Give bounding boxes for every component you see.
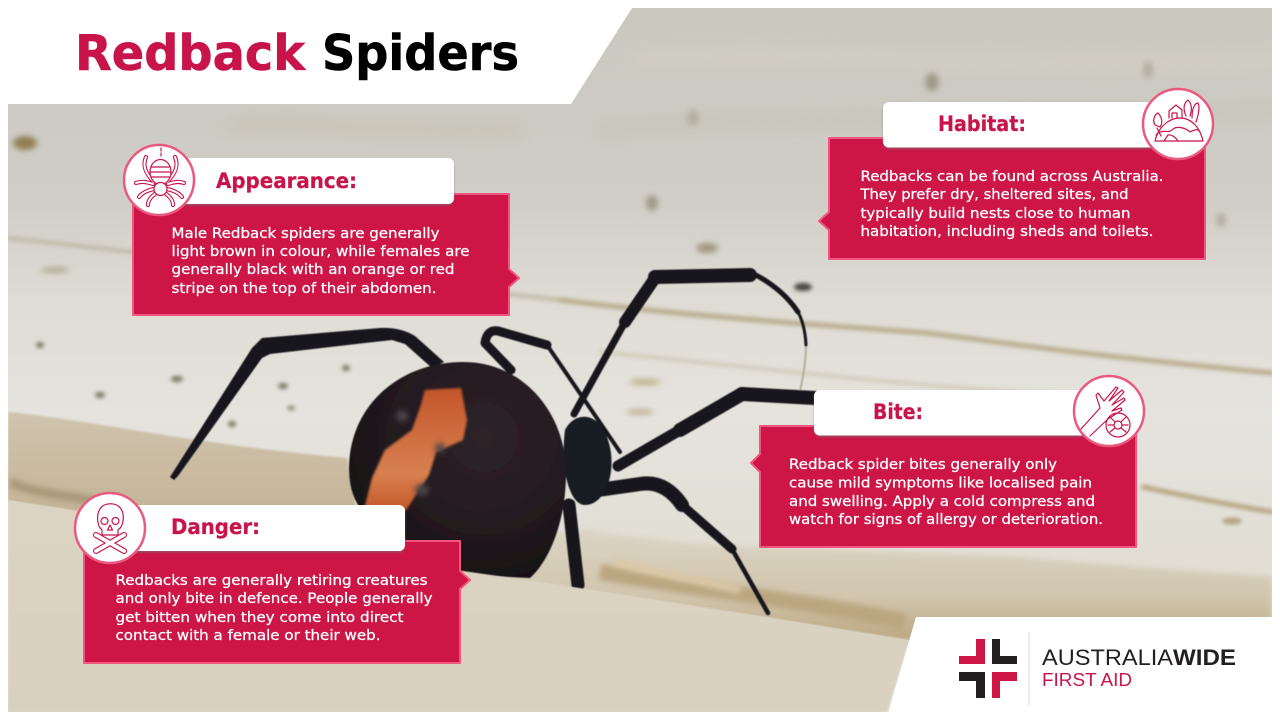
- panel: habitat: [819, 89, 1213, 259]
- icon: habitat: [1143, 89, 1213, 159]
- body text: stripe on the top of their abdomen.: [172, 281, 436, 297]
- body text: generally black with an orange or red: [172, 262, 454, 278]
- title text: Spiders: [322, 25, 519, 82]
- body text: light brown in colour, while females are: [172, 244, 470, 260]
- heading label: [170, 158, 454, 204]
- heading label: [125, 505, 405, 551]
- icon: bite on hand: [1074, 376, 1144, 446]
- title banner: [0, 0, 632, 104]
- body text: [116, 573, 432, 644]
- panel: danger: [75, 493, 470, 663]
- logo wordmark: AUSTRALIA: [1042, 645, 1173, 670]
- body text: contact with a female or their web.: [116, 628, 380, 644]
- logo wordmark: FIRST AID: [1042, 670, 1132, 690]
- title text: Redback: [75, 25, 306, 82]
- heading: Bite:: [873, 400, 923, 424]
- spider photo: [170, 273, 815, 613]
- body text: and swelling. Apply a cold compress and: [789, 494, 1095, 510]
- body text: [172, 226, 470, 297]
- body text: Male Redback spiders are generally: [172, 226, 440, 242]
- red text box: [84, 541, 470, 663]
- heading label: [883, 102, 1173, 148]
- icon: skull and crossbones: [75, 493, 145, 563]
- body text: habitation, including sheds and toilets.: [860, 224, 1154, 240]
- red text box: [751, 426, 1136, 547]
- panel: bite: [751, 376, 1144, 547]
- abdomen: [349, 362, 566, 578]
- red text box: [819, 138, 1205, 259]
- logo: cross mark: [959, 639, 1017, 698]
- body text: [859, 169, 1164, 240]
- red stripe: [364, 388, 467, 510]
- heading: Danger:: [171, 515, 260, 539]
- faint leg shadow: [800, 345, 806, 392]
- red text box: [133, 194, 519, 315]
- heading: Appearance:: [216, 169, 357, 193]
- body text: typically build nests close to human: [860, 206, 1130, 222]
- body text: get bitten when they come into direct: [116, 610, 404, 626]
- front board over spider: [8, 500, 909, 712]
- logo wordmark: [1042, 645, 1236, 690]
- left leg: [170, 328, 444, 480]
- body text: Redback spider bites generally only: [789, 457, 1057, 473]
- body text: and only bite in defence. People generally: [116, 591, 432, 607]
- body text: Redbacks are generally retiring creatures: [116, 573, 428, 589]
- body text: watch for signs of allergy or deterioration.: [789, 512, 1103, 528]
- logo panel: [886, 617, 1280, 720]
- body text: They prefer dry, sheltered sites, and: [859, 187, 1128, 203]
- cephalothorax: [564, 417, 612, 505]
- body text: [789, 457, 1103, 528]
- panel: appearance: [124, 145, 519, 315]
- logo wordmark: WIDE: [1173, 645, 1236, 670]
- abdomen highlights: [396, 410, 445, 496]
- heading: Habitat:: [938, 112, 1026, 136]
- icon: spider: [124, 145, 194, 215]
- body text: cause mild symptoms like localised pain: [789, 476, 1092, 492]
- body text: Redbacks can be found across Australia.: [860, 169, 1164, 185]
- heading label: [814, 390, 1104, 436]
